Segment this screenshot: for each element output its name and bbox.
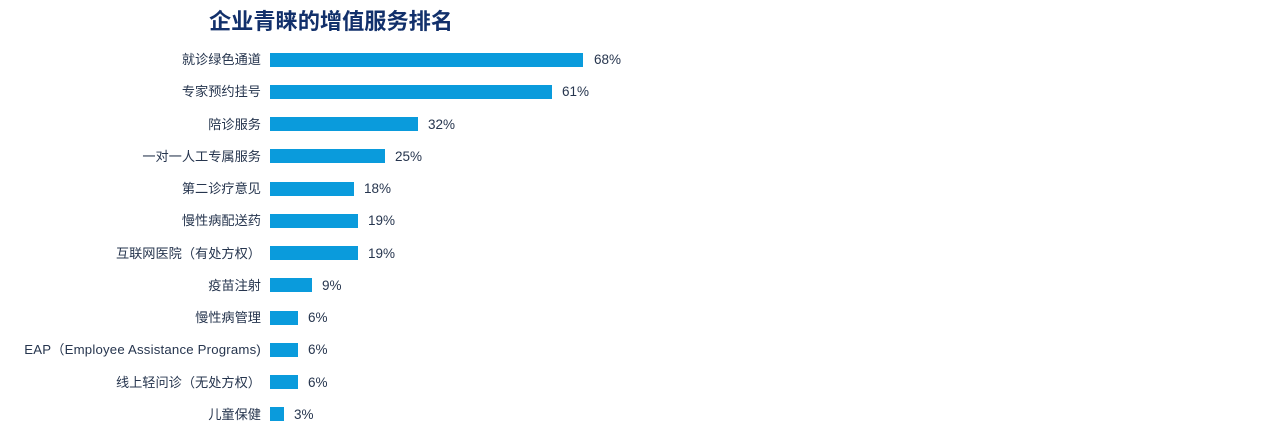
row: 互联网医院（有处方权） 19%: 互联网医院（有处方权） <box>116 246 261 260</box>
row: 慢性病管理 6%: 6% <box>308 310 328 325</box>
row: 一对一人工专属服务 25% <box>142 149 422 164</box>
row: 儿童保健 3%: 3% <box>294 407 314 422</box>
row: 第二诊疗意见 18%: 18% <box>364 181 391 196</box>
row: 互联网医院（有处方权） 19% <box>116 246 395 260</box>
row: 陪诊服务 32%: 陪诊服务 <box>208 116 261 132</box>
row: 儿童保健 3%: 儿童保健 <box>208 407 261 422</box>
row: EAP 6%: EAP（Employee Assistance Programs) <box>24 342 261 357</box>
row: 第二诊疗意见 18% <box>182 181 391 196</box>
row: 就诊绿色通道 68% <box>182 52 621 67</box>
row: 疫苗注射 9% <box>208 278 342 293</box>
row: 疫苗注射 9%: 疫苗注射 <box>208 278 261 293</box>
row: 疫苗注射 9%: 9% <box>322 278 342 293</box>
row: 一对一人工专属服务 25%: 一对一人工专属服务 <box>142 149 261 164</box>
row: 线上轻问诊（无处方权） 6%: 线上轻问诊（无处方权） <box>116 374 261 390</box>
row: 陪诊服务 32% <box>208 116 455 132</box>
row: 专家预约挂号 61%: 61% <box>562 84 589 99</box>
title: 企业青睐的增值服务排名 <box>209 9 453 34</box>
row: 专家预约挂号 61%: 专家预约挂号 <box>182 84 261 99</box>
row: 儿童保健 3% <box>208 407 314 422</box>
row: 就诊绿色通道 68%: 68% <box>594 52 621 67</box>
row: 慢性病配送药 19%: 19% <box>368 213 395 228</box>
row: 第二诊疗意见 18%: 第二诊疗意见 <box>182 181 261 196</box>
row: 慢性病配送药 19%: 慢性病配送药 <box>182 213 261 228</box>
row: 慢性病管理 6% <box>195 310 328 325</box>
row: 一对一人工专属服务 25%: 25% <box>395 149 422 164</box>
row: 慢性病管理 6%: 慢性病管理 <box>195 310 261 325</box>
row: 线上轻问诊（无处方权） 6% <box>116 374 328 390</box>
row: 慢性病配送药 19% <box>182 213 395 228</box>
bar chart <box>24 52 621 422</box>
row: 专家预约挂号 61% <box>182 84 589 99</box>
row: 线上轻问诊（无处方权） 6%: 6% <box>308 374 328 390</box>
row: EAP 6%: 6% <box>308 342 328 357</box>
row: 互联网医院（有处方权） 19%: 19% <box>368 246 395 260</box>
row: 就诊绿色通道 68%: 就诊绿色通道 <box>182 52 261 67</box>
row: 陪诊服务 32%: 32% <box>428 116 455 132</box>
